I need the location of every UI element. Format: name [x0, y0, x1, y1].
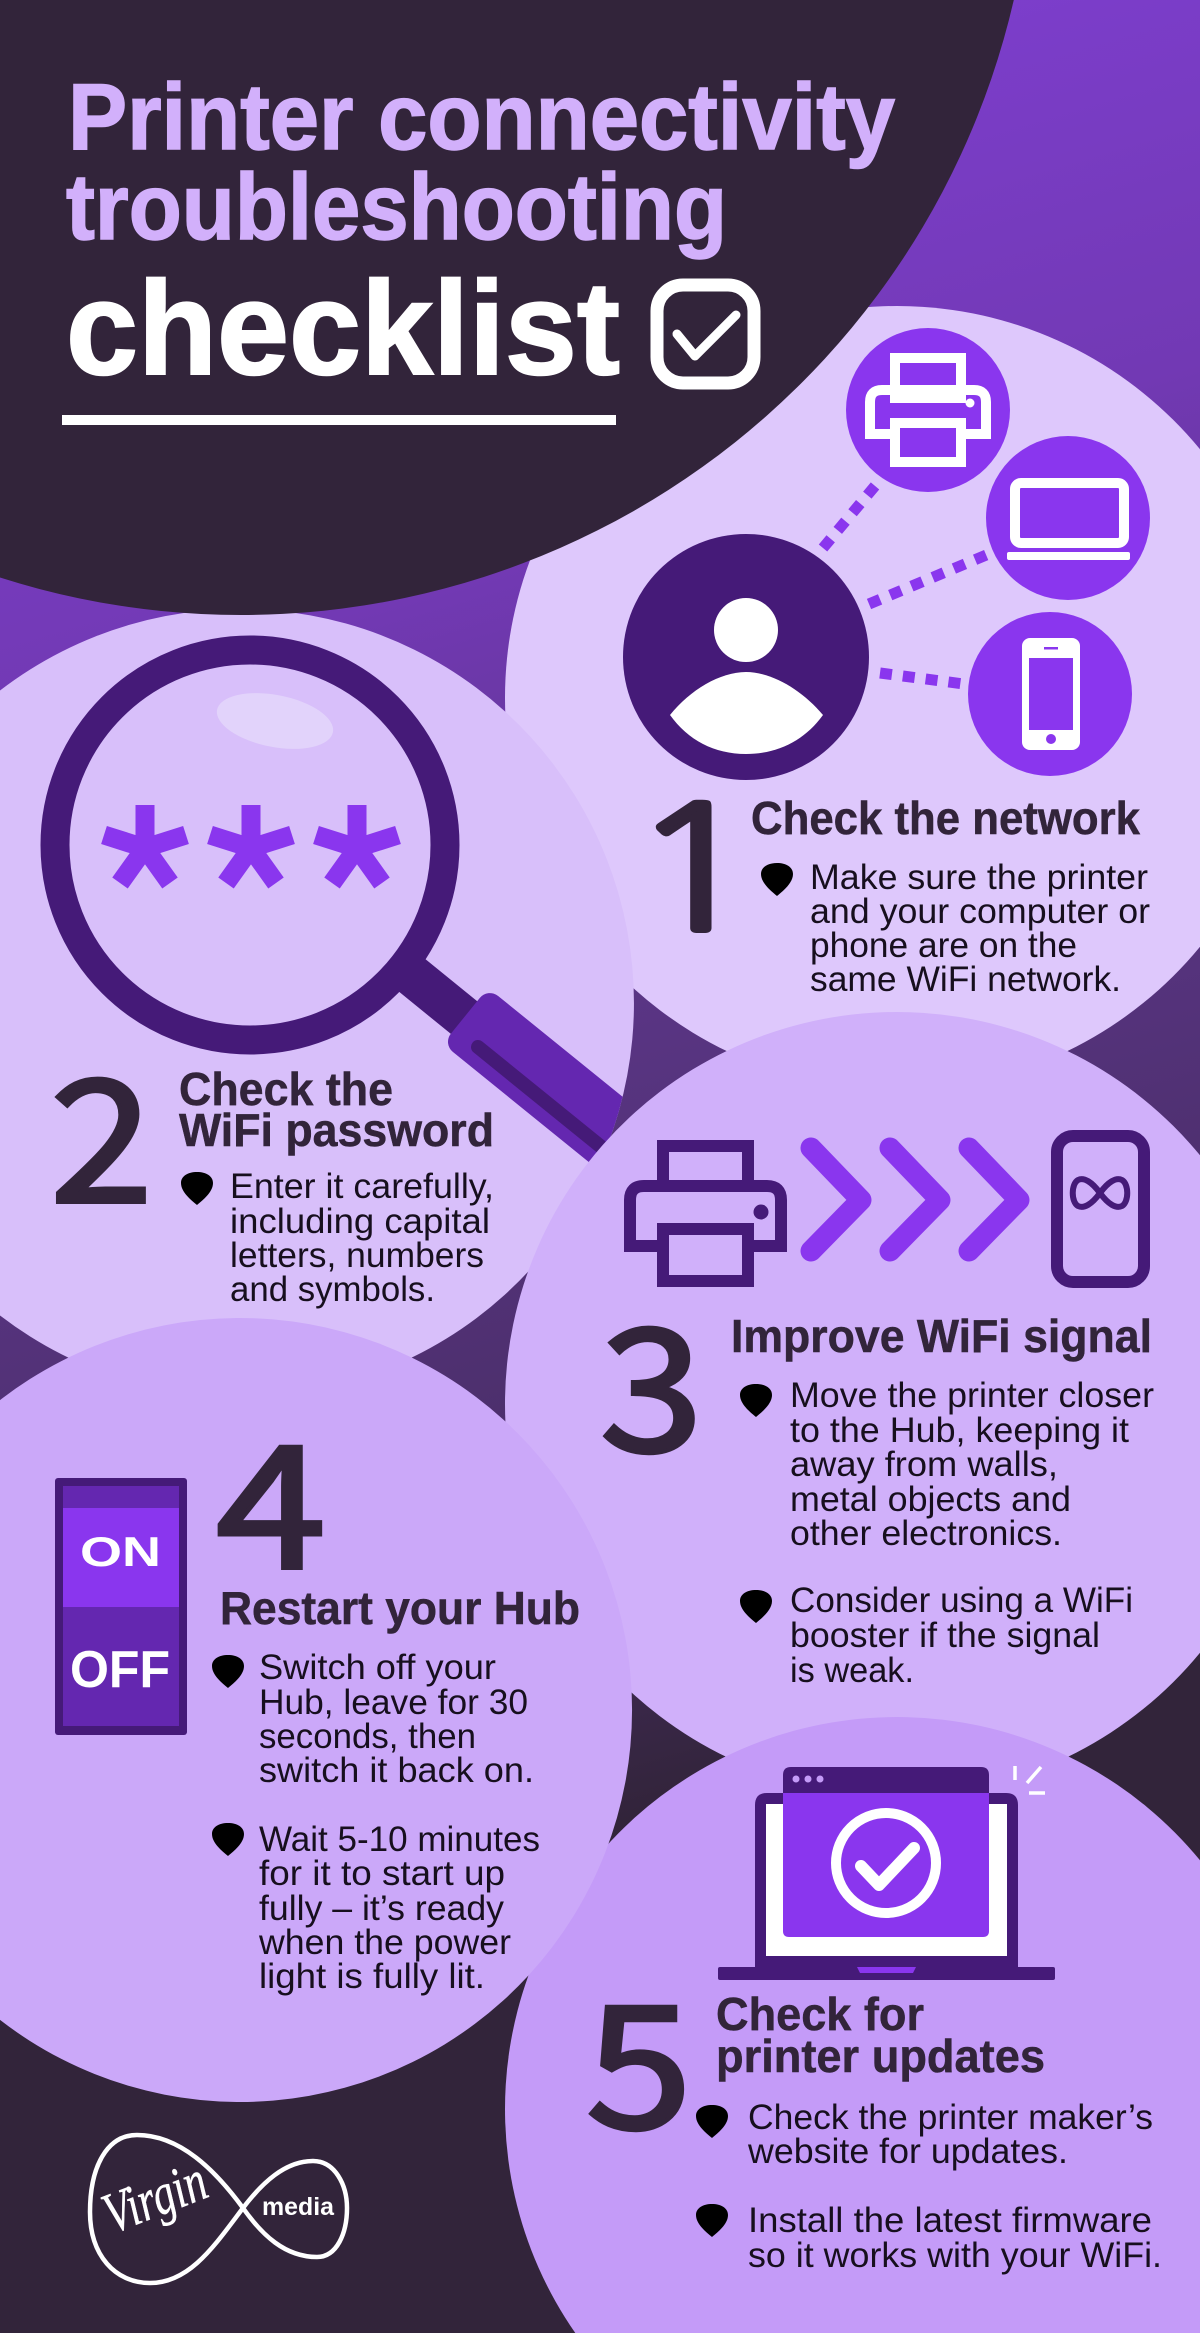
- panel: step 1 check the network: [505, 306, 1200, 1090]
- body text: switch off: [259, 1648, 534, 1790]
- body text: step 1: and your computer or: [810, 892, 1150, 931]
- body text: move the printer: metal objects and: [790, 1480, 1071, 1519]
- body text: step 2: letters, numbers: [230, 1236, 484, 1275]
- body text: wait: light is fully lit.: [259, 1957, 485, 1996]
- bullet icon: [181, 1172, 213, 1205]
- bullet icon: [740, 1590, 772, 1623]
- heading: check the WiFi password: WiFi password: [179, 1104, 494, 1156]
- body text: WiFi booster: is weak.: [790, 1651, 914, 1690]
- icon: tick box: [657, 285, 754, 383]
- number 4: 4: [216, 1371, 326, 1617]
- body text: printer maker website: website for updates.: [747, 2132, 1068, 2171]
- body text: switch off: Switch off your: [259, 1648, 496, 1687]
- icon: magnifying glass: [55, 650, 700, 1227]
- icon: on off switch: OFF: [70, 1641, 170, 1699]
- body text: WiFi booster: [790, 1581, 1133, 1690]
- number 3: 3: [600, 1254, 703, 1500]
- icon: laptop: [986, 436, 1150, 600]
- body text: wait: when the power: [258, 1923, 511, 1962]
- body text: step 1: same WiFi network.: [810, 960, 1121, 999]
- heading: check for printer updates: [716, 1988, 1045, 2082]
- panel: step 4 restart your hub: [0, 1318, 632, 2102]
- body text: step 2: Enter it carefully,: [230, 1167, 494, 1206]
- logo: Virgin Media: Virgin: [93, 2147, 216, 2246]
- body text: step 2: and symbols.: [230, 1270, 435, 1309]
- body text: wait: fully – it’s ready: [259, 1889, 505, 1928]
- arrows: chevrons: [811, 1148, 1019, 1251]
- icon: phone: [968, 612, 1132, 776]
- body text: switch off: seconds, then: [259, 1717, 476, 1756]
- icon: printer: [846, 328, 1010, 492]
- panel: step 2 check the WiFi password: [0, 613, 634, 1358]
- icon: on off switch: [55, 1478, 187, 1735]
- heading: check the WiFi password: Check the: [179, 1063, 393, 1115]
- body text: move the printer: other electronics.: [790, 1514, 1062, 1553]
- number 5: 5: [586, 1931, 692, 2177]
- bullet icon: [761, 863, 793, 896]
- title: checklist: [66, 255, 620, 403]
- body text: install firmware: Install the latest firmware: [748, 2201, 1152, 2240]
- heading: restart your hub: Restart your Hub: [220, 1582, 580, 1634]
- body text: move the printer: [790, 1376, 1154, 1553]
- icon: laptop with update window: [718, 1766, 1055, 1980]
- header panel: dark circle with title: [0, 0, 1014, 615]
- body text: WiFi booster: booster if the signal: [790, 1616, 1100, 1655]
- heading: check the network: Check the network: [751, 792, 1140, 844]
- body text: step 2: [230, 1167, 494, 1309]
- dotted connector: person to printer: [823, 480, 880, 548]
- bullet icon: [212, 1823, 244, 1856]
- asterisks in lens: [104, 805, 398, 883]
- body text: step 1: [810, 858, 1150, 999]
- body text: wait: Wait 5-10 minutes: [259, 1820, 540, 1859]
- body text: step 1: Make sure the printer: [810, 858, 1148, 897]
- body text: switch off: switch it back on.: [259, 1751, 534, 1790]
- bullet icon: [740, 1384, 772, 1417]
- body text: printer maker website: [747, 2098, 1153, 2171]
- icon: printer outline: [630, 1146, 781, 1281]
- dotted connector: person to laptop: [869, 553, 991, 604]
- logo: Virgin Media: [90, 2135, 347, 2283]
- title: troubleshooting: [66, 154, 727, 259]
- title: [66, 64, 895, 403]
- heading: check for printer updates: printer updates: [716, 2030, 1045, 2082]
- body text: WiFi booster: Consider using a WiFi: [790, 1581, 1133, 1620]
- body text: move the printer: to the Hub, keeping it: [790, 1411, 1129, 1450]
- icon: person: [623, 534, 869, 780]
- heading: improve WiFi signal: Improve WiFi signal: [731, 1310, 1152, 1362]
- panel: step 3 improve WiFi signal: [505, 1012, 1200, 1796]
- body text: printer maker website: Check the printer maker’s: [748, 2098, 1153, 2137]
- dotted connector: person to phone: [880, 673, 964, 684]
- body text: install firmware: so it works with your WiFi.: [748, 2236, 1162, 2275]
- logo: Virgin Media: media: [262, 2193, 335, 2221]
- body text: move the printer: away from walls,: [790, 1445, 1058, 1484]
- title underline: [62, 415, 616, 425]
- panel: step 5 check for printer updates: [505, 1717, 1200, 2333]
- number 2: 2: [50, 1005, 153, 1251]
- body text: wait: for it to start up: [259, 1854, 505, 1893]
- number 1: 1: [628, 783, 760, 955]
- icon: hub device: [1057, 1136, 1144, 1282]
- body text: step 2: including capital: [230, 1202, 490, 1241]
- icon: on off switch: ON: [80, 1528, 161, 1575]
- bullet icon: [696, 2105, 728, 2138]
- body text: install firmware: [748, 2201, 1162, 2275]
- body text: move the printer: Move the printer closer: [790, 1376, 1154, 1415]
- bullet icon: [212, 1655, 244, 1688]
- title: Printer connectivity: [68, 64, 895, 169]
- heading: check for printer updates: Check for: [716, 1988, 924, 2040]
- bullet icon: [696, 2204, 728, 2237]
- body text: step 1: phone are on the: [810, 926, 1077, 965]
- heading: check the WiFi password: [179, 1063, 494, 1156]
- body text: wait: [258, 1820, 540, 1996]
- body text: switch off: Hub, leave for 30: [259, 1683, 528, 1722]
